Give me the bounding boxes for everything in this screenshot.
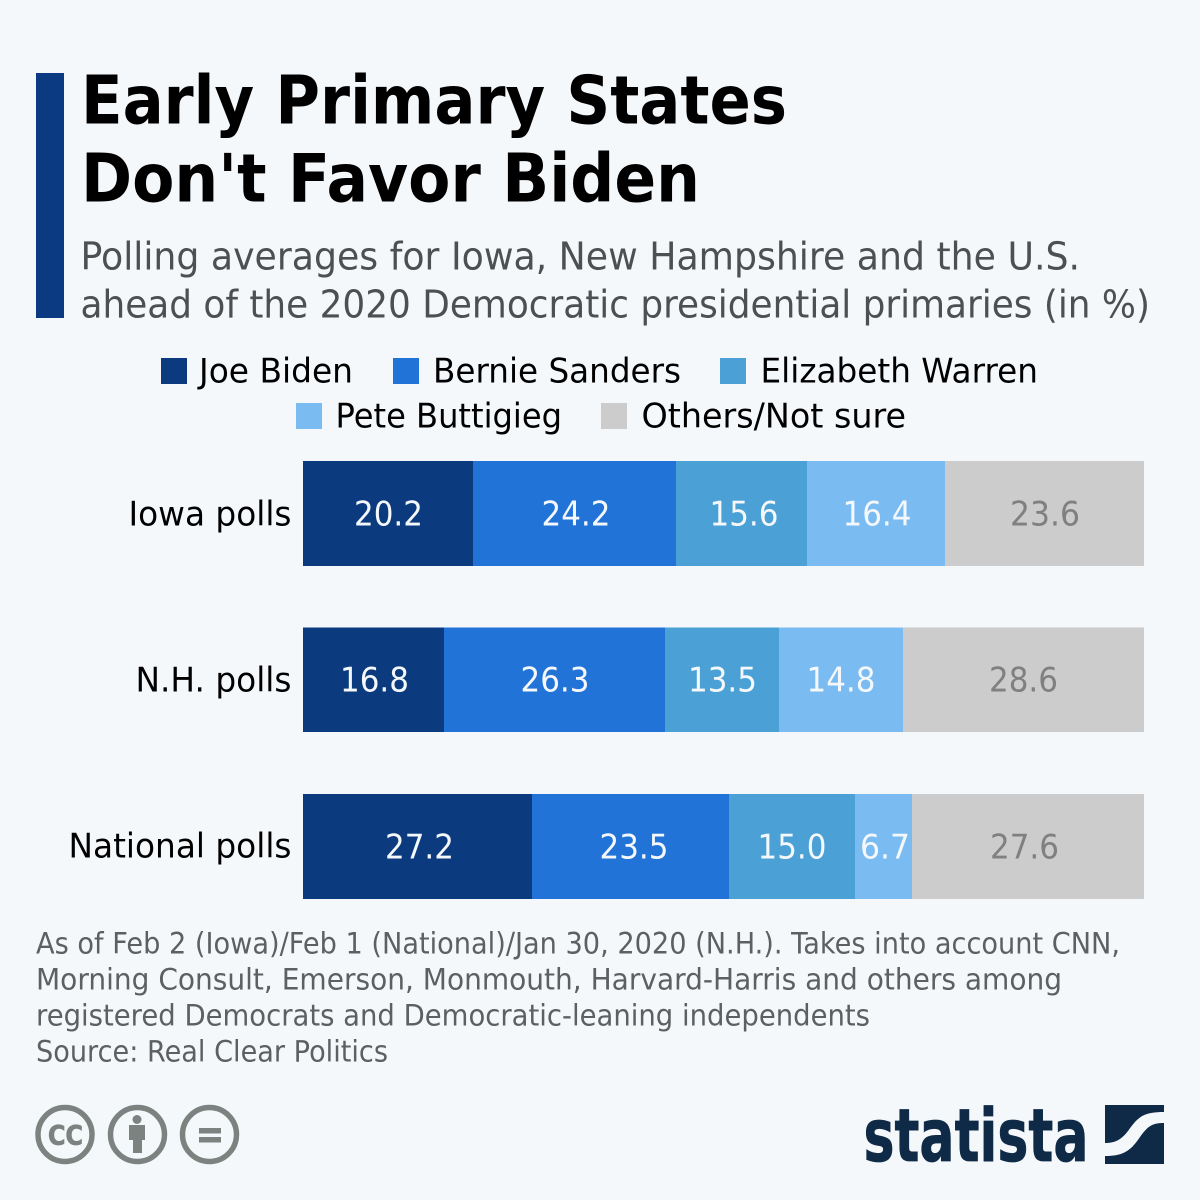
footnote and source bbox=[36, 926, 1120, 1068]
stacked bar: National: 27.2 bbox=[385, 828, 454, 868]
row: National polls bbox=[68, 794, 1144, 899]
stacked bar: N.H.: 14.8 bbox=[806, 660, 876, 700]
stacked bar: Iowa: 23.6 bbox=[1010, 494, 1080, 534]
stacked bar: N.H.: 16.8 bbox=[340, 660, 409, 700]
stacked bar: Iowa: 20.2 bbox=[354, 494, 423, 534]
icon: attribution bbox=[110, 1108, 164, 1162]
icon: creative commons bbox=[38, 1108, 92, 1162]
stacked bar: N.H.: 28.6 bbox=[989, 660, 1058, 700]
legend item: Bernie Sanders: Bernie Sanders bbox=[433, 352, 681, 392]
title: Don't Favor Biden bbox=[81, 140, 700, 218]
footnote and source: registered Democrats and Democratic-leaning independents bbox=[36, 998, 870, 1032]
stacked bar: N.H.: 13.5 bbox=[688, 660, 757, 700]
title accent bar bbox=[36, 73, 64, 318]
stacked bar: Iowa: 24.2 bbox=[542, 494, 610, 534]
footnote and source: Source: Real Clear Politics bbox=[36, 1034, 388, 1068]
icon: creative commons: CC bbox=[48, 1120, 83, 1152]
title bbox=[81, 62, 787, 218]
stacked bar: Iowa: 16.4 bbox=[842, 494, 912, 534]
stacked bar: N.H.: 26.3 bbox=[520, 660, 590, 700]
legend item: Pete Buttigieg: Pete Buttigieg bbox=[336, 396, 562, 436]
footnote and source: As of Feb 2 (Iowa)/Feb 1 (National)/Jan 30, 2020 (N.H.). Takes into account CNN, bbox=[36, 926, 1120, 960]
legend item: Others/Not sure: Others/Not sure bbox=[642, 396, 906, 436]
logo mark bbox=[1105, 1105, 1164, 1143]
row: N.H. polls bbox=[136, 628, 1144, 732]
stacked bar: National: 6.7 bbox=[860, 828, 910, 868]
stacked bar: National bbox=[303, 794, 1144, 899]
stacked bar: Iowa bbox=[303, 461, 1144, 566]
subtitle: ahead of the 2020 Democratic presidential primaries (in %) bbox=[80, 282, 1150, 326]
stacked bar: National: 23.5 bbox=[600, 828, 668, 868]
stacked bar: Iowa: 15.6 bbox=[710, 494, 778, 534]
subtitle bbox=[80, 234, 1150, 326]
row: Iowa polls bbox=[128, 461, 1144, 566]
row label: National polls: National polls bbox=[68, 826, 292, 866]
icon: no derivatives bbox=[182, 1108, 236, 1162]
stacked bar: National: 27.6 bbox=[990, 828, 1059, 868]
legend item: Elizabeth Warren: Elizabeth Warren bbox=[760, 352, 1038, 392]
stacked bar: N.H. bbox=[303, 628, 1144, 732]
subtitle: Polling averages for Iowa, New Hampshire and the U.S. bbox=[80, 234, 1080, 278]
footnote and source: Morning Consult, Emerson, Monmouth, Harvard-Harris and others among bbox=[36, 962, 1062, 996]
row label: Iowa polls: Iowa polls bbox=[128, 494, 292, 534]
row label: N.H. polls: N.H. polls bbox=[136, 660, 292, 700]
stacked bar: National: 15.0 bbox=[758, 828, 826, 868]
title: Early Primary States bbox=[81, 62, 787, 140]
legend item: Joe Biden: Joe Biden bbox=[197, 352, 353, 392]
legend bbox=[161, 352, 1038, 436]
logo wordmark: statista bbox=[864, 1094, 1088, 1179]
statista logo bbox=[864, 1094, 1164, 1179]
